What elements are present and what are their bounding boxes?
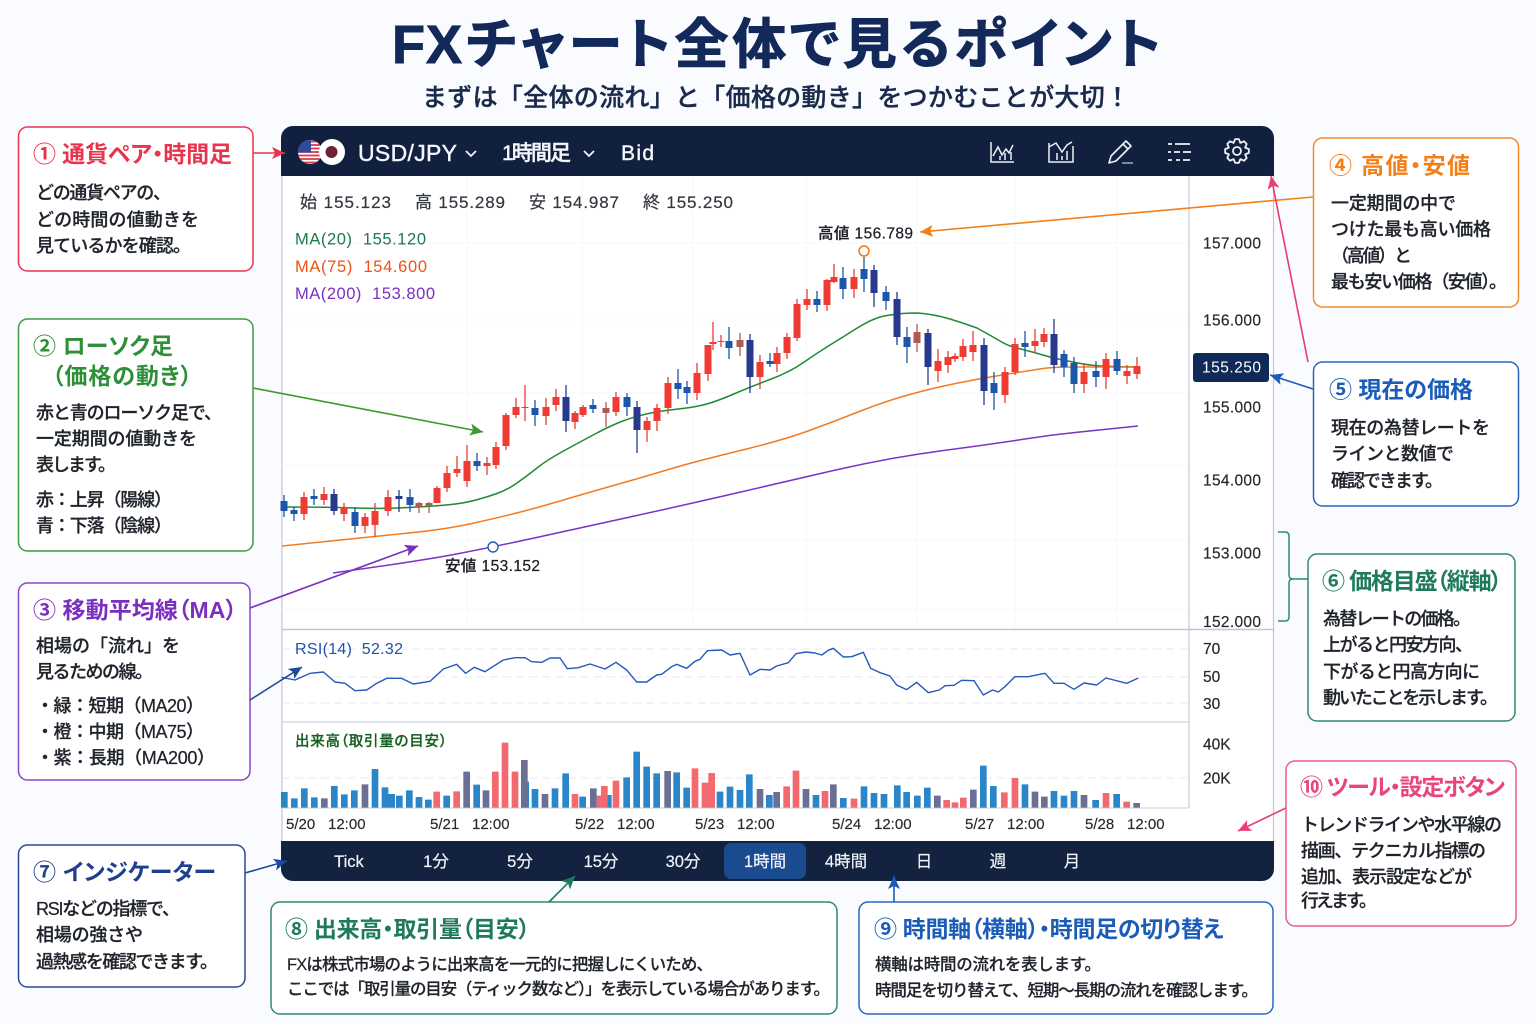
arrow: callout 9 [893,876,895,902]
OHLC row: 終 155.250 [643,193,733,212]
callout 8: volume [271,902,837,1014]
callout 5: current price [1314,362,1518,506]
time axis labels: 5/28 [1085,816,1114,833]
volume bars [284,743,1137,808]
timeframe bar: 15分 [584,852,619,871]
RSI line [282,648,1138,695]
callout 3: moving averages: ・紫：長期（MA200） [36,748,215,768]
arrow: callout 5 to price tag [1270,375,1313,389]
RSI label: RSI(14) 52.32 [295,641,403,658]
time axis labels: 12:00 [617,816,655,833]
subtitle: まずは「全体の流れ」と「価格の動き」をつかむことが大切！ [422,84,1130,112]
time axis labels: 12:00 [1007,816,1045,833]
high marker [818,224,913,256]
timeframe: 1時間足 [502,142,571,165]
callout 2: candlesticks: ② ローソク足 [33,333,173,359]
callout 10: tools: ⑩ ツール・設定ボタン [1300,774,1505,800]
current price tag: 155.250 [1202,360,1261,376]
timeframe bar: 月 [1064,853,1080,871]
arrow: callout 1 [253,152,285,154]
chevron [584,151,594,156]
callout 9: time axis [859,902,1273,1014]
callout 1: currency pair: どの通貨ペアの、 [36,183,171,203]
callout 10: tools: 行えます。 [1301,891,1377,911]
moving average legend: MA(200) 153.800 [295,285,435,303]
price axis: 30 [1203,696,1221,713]
time axis labels: 5/27 [965,816,994,833]
callout 5: current price: ⑤ 現在の価格 [1329,376,1473,402]
callout 9: time axis: 時間足を切り替えて、短期～長期の流れを確認します。 [875,981,1258,1000]
callout 1: currency pair [18,127,253,271]
callout 8: volume: ここでは「取引量の目安（ティック数など）」を表示している場合があります。 [287,978,830,998]
price axis: 20K [1203,770,1231,788]
callout 10: tools: 描画、テクニカル指標の [1301,841,1486,861]
callout 6: price scale: 上がると円安方向、 [1323,634,1473,655]
OHLC row: 安 154.987 [529,193,619,212]
callout 10: tools [1286,761,1516,926]
callout 3: moving averages: ・緑：短期（MA20） [36,696,204,716]
callout 9: time axis: ⑨ 時間軸（横軸）・時間足の切り替え [874,916,1224,942]
chevron [466,151,476,156]
callout 10: tools: 追加、表示設定などが [1301,866,1472,887]
time axis labels: 12:00 [737,816,775,833]
callout 9: time axis: 横軸は時間の流れを表します。 [875,955,1101,974]
bracket: price scale [1278,532,1308,621]
callout 2: candlesticks: 表します。 [36,455,116,475]
timeframe bar [281,841,1274,881]
time axis labels: 12:00 [472,816,510,833]
header bar [281,126,1274,176]
callout 7: indicators: RSIなどの指標で、 [36,899,180,919]
active timeframe pill [724,843,806,879]
title: チャート全体で見るポイント [466,15,1161,75]
callout 4: high and low: 最も安い価格（安値）。 [1331,272,1507,292]
callout 2: candlesticks [18,319,253,551]
callout 2: candlesticks: 赤と青のローソク足で、 [36,403,222,423]
time axis labels: 5/24 [832,816,861,833]
callout 5: current price: 現在の為替レートを [1331,418,1490,438]
time axis labels: 12:00 [874,816,912,833]
callout 7: indicators [18,845,245,987]
moving average legend: MA(75) 154.600 [295,258,427,276]
current price tag [1193,353,1269,382]
time axis labels: 5/20 [286,816,315,833]
arrow: callout 3 to MA [250,546,418,608]
volume label: 出来高（取引量の目安） [295,733,447,750]
OHLC row: 高 155.289 [415,193,505,212]
callout 3: moving averages: 見るための線。 [36,662,153,682]
icon: indicator chart [991,142,1014,162]
callout 4: high and low: ④ 高値・安値 [1329,152,1470,178]
low marker [445,542,540,575]
callout 6: price scale: 動いたことを示します。 [1323,688,1498,708]
callout 8: volume: FXは株式市場のように出来高を一元的に把握しにくいため、 [287,955,713,974]
low marker: 安値 153.152 [445,557,540,575]
price axis: 155.000 [1203,400,1261,416]
timeframe bar: 日 [916,853,932,871]
icon: gear [1225,139,1249,163]
callout 2: candlesticks: （価格の動き） [52,363,192,389]
candlesticks [284,257,1137,537]
arrow: callout 4 [920,197,1313,232]
callout 8: volume: ⑧ 出来高・取引量（目安） [285,916,530,942]
callout 7: indicators: 過熱感を確認できます。 [36,952,218,972]
price axis: 156.000 [1203,312,1261,330]
icon: area chart [1049,142,1073,162]
callout 4: high and low [1314,138,1518,307]
time axis labels: 5/21 [430,816,459,833]
muted candles [419,324,917,513]
timeframe bar: 1分 [423,852,449,871]
moving average legend [295,230,435,303]
price axis: 70 [1203,641,1221,658]
timeframe bar: 週 [990,852,1006,871]
time axis labels: 5/23 [695,816,724,833]
callout 2: candlesticks: 赤：上昇（陽線） [36,490,172,510]
red candles [304,264,1137,537]
MA200 line [333,426,1138,573]
moving average lines [282,313,1140,573]
timeframe bar: 1時間 [744,852,786,871]
arrow: callout 2 [253,388,483,432]
icon: sliders [1168,144,1191,160]
time axis labels: 12:00 [328,816,366,833]
OHLC row: 始 155.123 [300,193,391,212]
callout 3: moving averages [18,583,250,780]
callout 6: price scale: 下がると円高方向に [1323,661,1480,682]
callout 1: currency pair: どの時間の値動きを [36,210,199,230]
title: FX [392,15,462,75]
price axis: 40K [1203,736,1231,754]
callout 5: current price: 確認できます。 [1331,471,1443,491]
price axis [1203,236,1261,788]
callout 7: indicators: ⑦ インジケーター [33,859,216,885]
price axis: 50 [1203,669,1221,686]
navy candles [334,265,1054,515]
arrow: callout 10 [1238,808,1286,831]
callout 5: current price: ラインと数値で [1331,444,1454,464]
timeframe bar: Tick [334,853,365,871]
price axis: 157.000 [1203,236,1261,252]
arrow: callout 3 to RSI [250,667,302,700]
time axis labels: 12:00 [1127,816,1165,833]
callout 7: indicators: 相場の強さや [36,925,143,945]
arrow: callout 7 [245,861,287,873]
OHLC row [300,193,733,212]
callout 4: high and low: 一定期間の中で [1331,194,1456,214]
price axis: 152.000 [1203,614,1261,631]
callout 1: currency pair: ① 通貨ペア・時間足 [33,141,232,167]
callout 1: currency pair: 見ているかを確認。 [36,236,191,256]
callout 10: tools: トレンドラインや水平線の [1301,815,1502,835]
MA75 line [282,367,1140,546]
price axis: 154.000 [1203,472,1261,490]
high marker: 高値 156.789 [818,224,913,242]
callout 4: high and low: つけた最も高い価格 [1331,220,1491,240]
time axis labels [286,816,1165,833]
arrow: callout 8 [549,876,575,902]
callout 2: candlesticks: 青：下落（陰線） [36,516,172,536]
bid label: Bid [621,142,654,165]
callout 2: candlesticks: 一定期間の値動きを [36,429,197,449]
icon: Japan flag [319,139,345,165]
time axis labels: 5/22 [575,816,604,833]
callout 3: moving averages: 相場の「流れ」を [36,636,180,656]
arrow: pink pointer to toolbar [1271,176,1308,362]
callout 6: price scale: ⑥ 価格目盛（縦軸） [1322,568,1502,594]
callout 3: moving averages: ③ 移動平均線（MA） [33,597,237,623]
icon: US flag [298,140,322,164]
blue candles [284,257,1117,533]
icon: pencil [1109,141,1133,163]
panel: chart [281,126,1274,881]
callout 6: price scale [1308,554,1515,721]
callout 6: price scale: 為替レートの価格。 [1323,609,1471,629]
callout 3: moving averages: ・橙：中期（MA75） [36,722,204,742]
timeframe bar: 5分 [507,852,533,871]
timeframe bar: 30分 [666,852,701,871]
callout 4: high and low: （高値）と [1331,246,1412,266]
moving average legend: MA(20) 155.120 [295,230,426,248]
timeframe bar: 4時間 [825,852,867,871]
MA20 line [282,313,1140,508]
currency pair: USD/JPY [358,140,457,166]
price axis: 153.000 [1203,546,1261,562]
